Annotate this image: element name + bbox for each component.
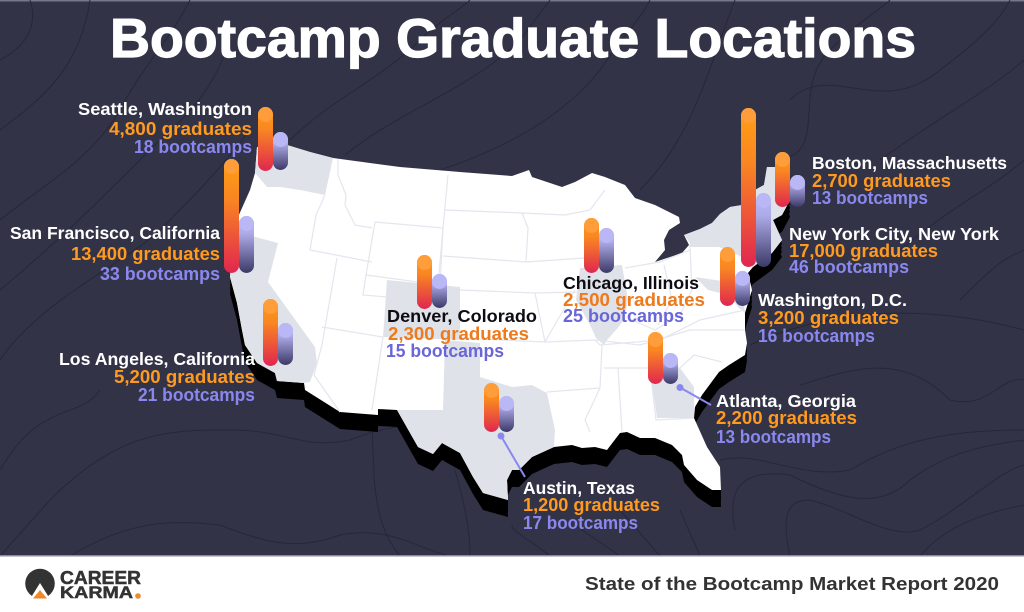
label: Austin	[523, 478, 660, 533]
label: New York City	[789, 224, 999, 277]
report name: State of the Bootcamp Market Report 2020	[585, 573, 999, 594]
great lakes	[630, 190, 715, 270]
label: San Francisco: 13,400 graduates	[71, 244, 220, 264]
map of United States	[230, 145, 790, 517]
label: Chicago: Chicago, Illinois	[563, 273, 699, 293]
footer	[0, 555, 1024, 612]
label: San Francisco	[10, 223, 220, 284]
label: New York City: New York City, New York	[789, 224, 999, 244]
label: Atlanta	[716, 391, 857, 447]
label: Atlanta: 2,200 graduates	[716, 408, 857, 428]
label: New York City: 17,000 graduates	[789, 241, 938, 261]
title: Bootcamp Graduate Locations	[110, 7, 916, 69]
label: Denver: Denver, Colorado	[387, 306, 537, 326]
label: New York City: 46 bootcamps	[789, 257, 909, 277]
bars: Washington DC	[720, 247, 750, 306]
leader: Austin	[498, 432, 525, 477]
label: Seattle	[78, 99, 252, 157]
label: Los Angeles: 21 bootcamps	[138, 385, 255, 405]
state borders	[310, 159, 745, 432]
highlighted states	[230, 145, 790, 500]
map land	[230, 145, 790, 500]
label: Washington DC: 16 bootcamps	[758, 326, 875, 346]
bars: Austin	[484, 383, 514, 432]
label: Atlanta: Atlanta, Georgia	[716, 391, 856, 411]
label: Washington DC	[758, 290, 907, 346]
label: Seattle: Seattle, Washington	[78, 99, 252, 119]
logo: Career Karma: CAREER	[60, 568, 141, 588]
bars: Chicago	[584, 218, 614, 273]
bars: Boston	[775, 152, 805, 207]
bars: New York City	[741, 108, 771, 267]
label: Boston: 2,700 graduates	[812, 171, 951, 191]
bars: Los Angeles	[263, 299, 293, 366]
label: Los Angeles: 5,200 graduates	[114, 367, 255, 387]
label: Denver: 2,300 graduates	[388, 324, 529, 344]
label: Washington DC: Washington, D.C.	[758, 290, 907, 310]
label: Boston	[812, 153, 1007, 208]
label: San Francisco: San Francisco, California	[10, 223, 220, 243]
label: Los Angeles	[59, 349, 255, 405]
label: Boston: Boston, Massachusetts	[812, 153, 1007, 173]
label: Denver: 15 bootcamps	[386, 341, 504, 361]
label: Chicago: 25 bootcamps	[563, 306, 684, 326]
label: Chicago: 2,500 graduates	[563, 290, 705, 310]
bars: Denver	[417, 255, 447, 309]
logo: Career Karma: KARMA	[60, 583, 133, 602]
map shadow	[230, 149, 790, 517]
label: Denver	[386, 306, 537, 361]
bars: San Francisco	[224, 159, 254, 273]
label: Austin: 17 bootcamps	[523, 513, 638, 533]
label: Boston: 13 bootcamps	[812, 188, 928, 208]
label: Seattle: 4,800 graduates	[109, 119, 252, 139]
label: Atlanta: 13 bootcamps	[716, 427, 831, 447]
logo: Career Karma	[25, 568, 141, 602]
bars: Atlanta	[648, 332, 678, 384]
label: Washington DC: 3,200 graduates	[758, 308, 899, 328]
bars: Seattle	[258, 107, 288, 171]
leader: Atlanta	[676, 384, 711, 405]
label: Los Angeles: Los Angeles, California	[59, 349, 255, 369]
label: Chicago	[563, 273, 705, 326]
label: Seattle: 18 bootcamps	[134, 137, 252, 157]
label: Austin: 1,200 graduates	[523, 495, 660, 515]
label: Austin: Austin, Texas	[523, 478, 635, 498]
label: San Francisco: 33 bootcamps	[100, 264, 220, 284]
